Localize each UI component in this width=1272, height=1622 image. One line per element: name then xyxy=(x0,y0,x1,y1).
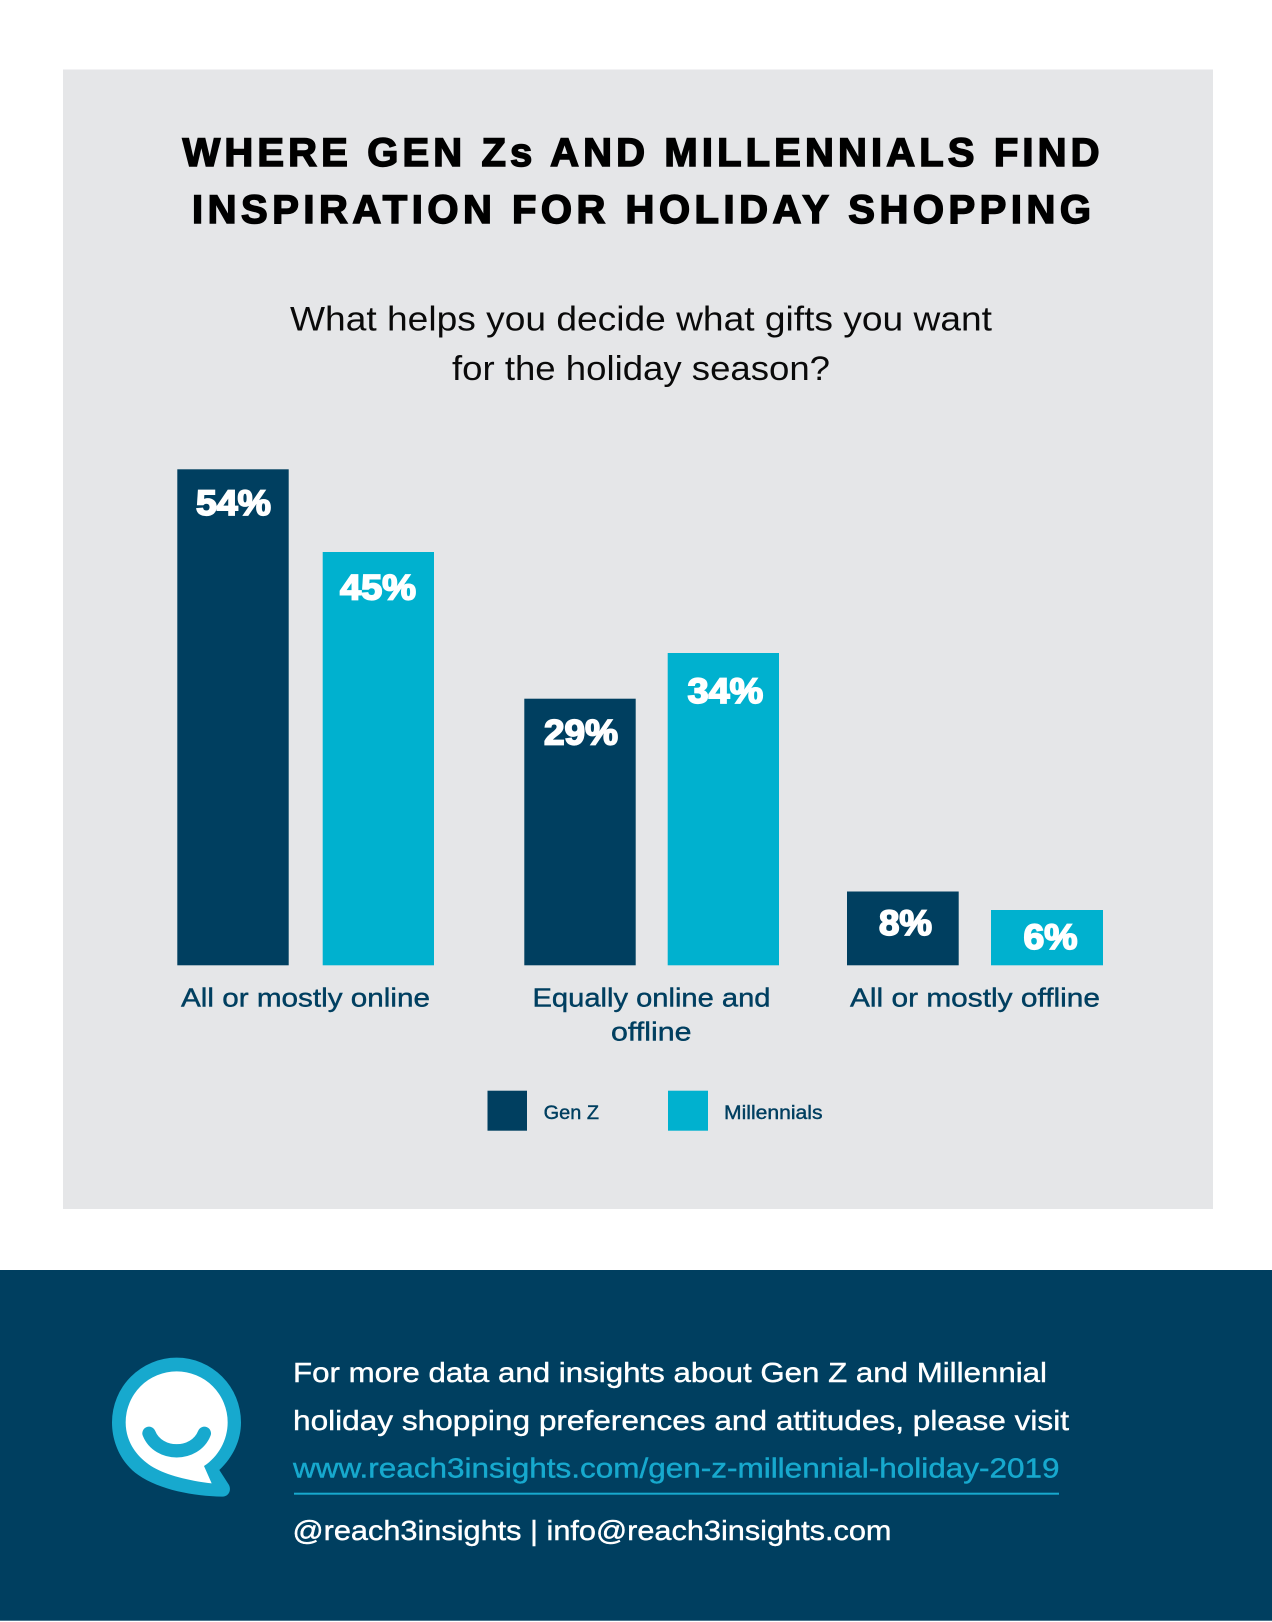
bar: Gen Z 54%: 54% xyxy=(196,484,271,523)
legend item: Millennials: Millennials xyxy=(724,1103,822,1124)
title xyxy=(182,131,1100,232)
panel: chart background xyxy=(63,70,1213,1209)
axis label: all or mostly online: All or mostly online xyxy=(181,982,430,1012)
link with underline: www.reach3insights.com/gen-z-millennial-holiday-2019 xyxy=(292,1452,1060,1484)
axis label: equally online and offline: offline xyxy=(611,1016,692,1046)
panel: footer band xyxy=(0,1270,1272,1621)
bar: Millennials 6% xyxy=(991,910,1103,965)
legend item: Gen Z: Gen Z xyxy=(544,1103,599,1124)
survey question: for the holiday season? xyxy=(452,350,830,388)
axis label: all or mostly offline: All or mostly offline xyxy=(850,982,1100,1012)
legend item: Gen Z xyxy=(488,1091,599,1131)
axis label: equally online and offline: Equally online and xyxy=(532,982,770,1012)
survey question xyxy=(290,300,993,388)
call to action text xyxy=(293,1357,1069,1436)
bar: Gen Z 29%: 29% xyxy=(544,714,618,752)
bar: Millennials 6%: 6% xyxy=(1024,918,1078,957)
bar: Gen Z 54% xyxy=(177,469,289,965)
title: INSPIRATION FOR HOLIDAY SHOPPING xyxy=(192,188,1091,232)
legend xyxy=(488,1091,822,1131)
icon: smiling speech bubble logo xyxy=(112,1358,241,1497)
axis label: equally online and offline xyxy=(532,982,770,1046)
group: all or mostly offline xyxy=(847,892,1103,1012)
contact details: @reach3insights | info@reach3insights.com xyxy=(292,1515,892,1546)
bar: Gen Z 8%: 8% xyxy=(879,904,932,943)
survey question: What helps you decide what gifts you want xyxy=(290,300,993,338)
call to action text: For more data and insights about Gen Z and Millennial xyxy=(293,1357,1047,1388)
title: WHERE GEN Zs AND MILLENNIALS FIND xyxy=(182,131,1100,175)
bar: Gen Z 29% xyxy=(524,699,636,965)
group: all or mostly online xyxy=(177,469,434,1012)
bar chart xyxy=(177,469,1103,1046)
bar: Millennials 45%: 45% xyxy=(340,568,416,608)
group: equally online and offline xyxy=(524,653,779,1046)
bar: Gen Z 8% xyxy=(847,892,959,965)
call to action text: holiday shopping preferences and attitudes, please visit xyxy=(293,1405,1069,1436)
bar: Millennials 34% xyxy=(668,653,779,965)
bar: Millennials 45% xyxy=(323,552,434,965)
legend item: Millennials xyxy=(668,1091,822,1131)
bar: Millennials 34%: 34% xyxy=(688,672,763,711)
